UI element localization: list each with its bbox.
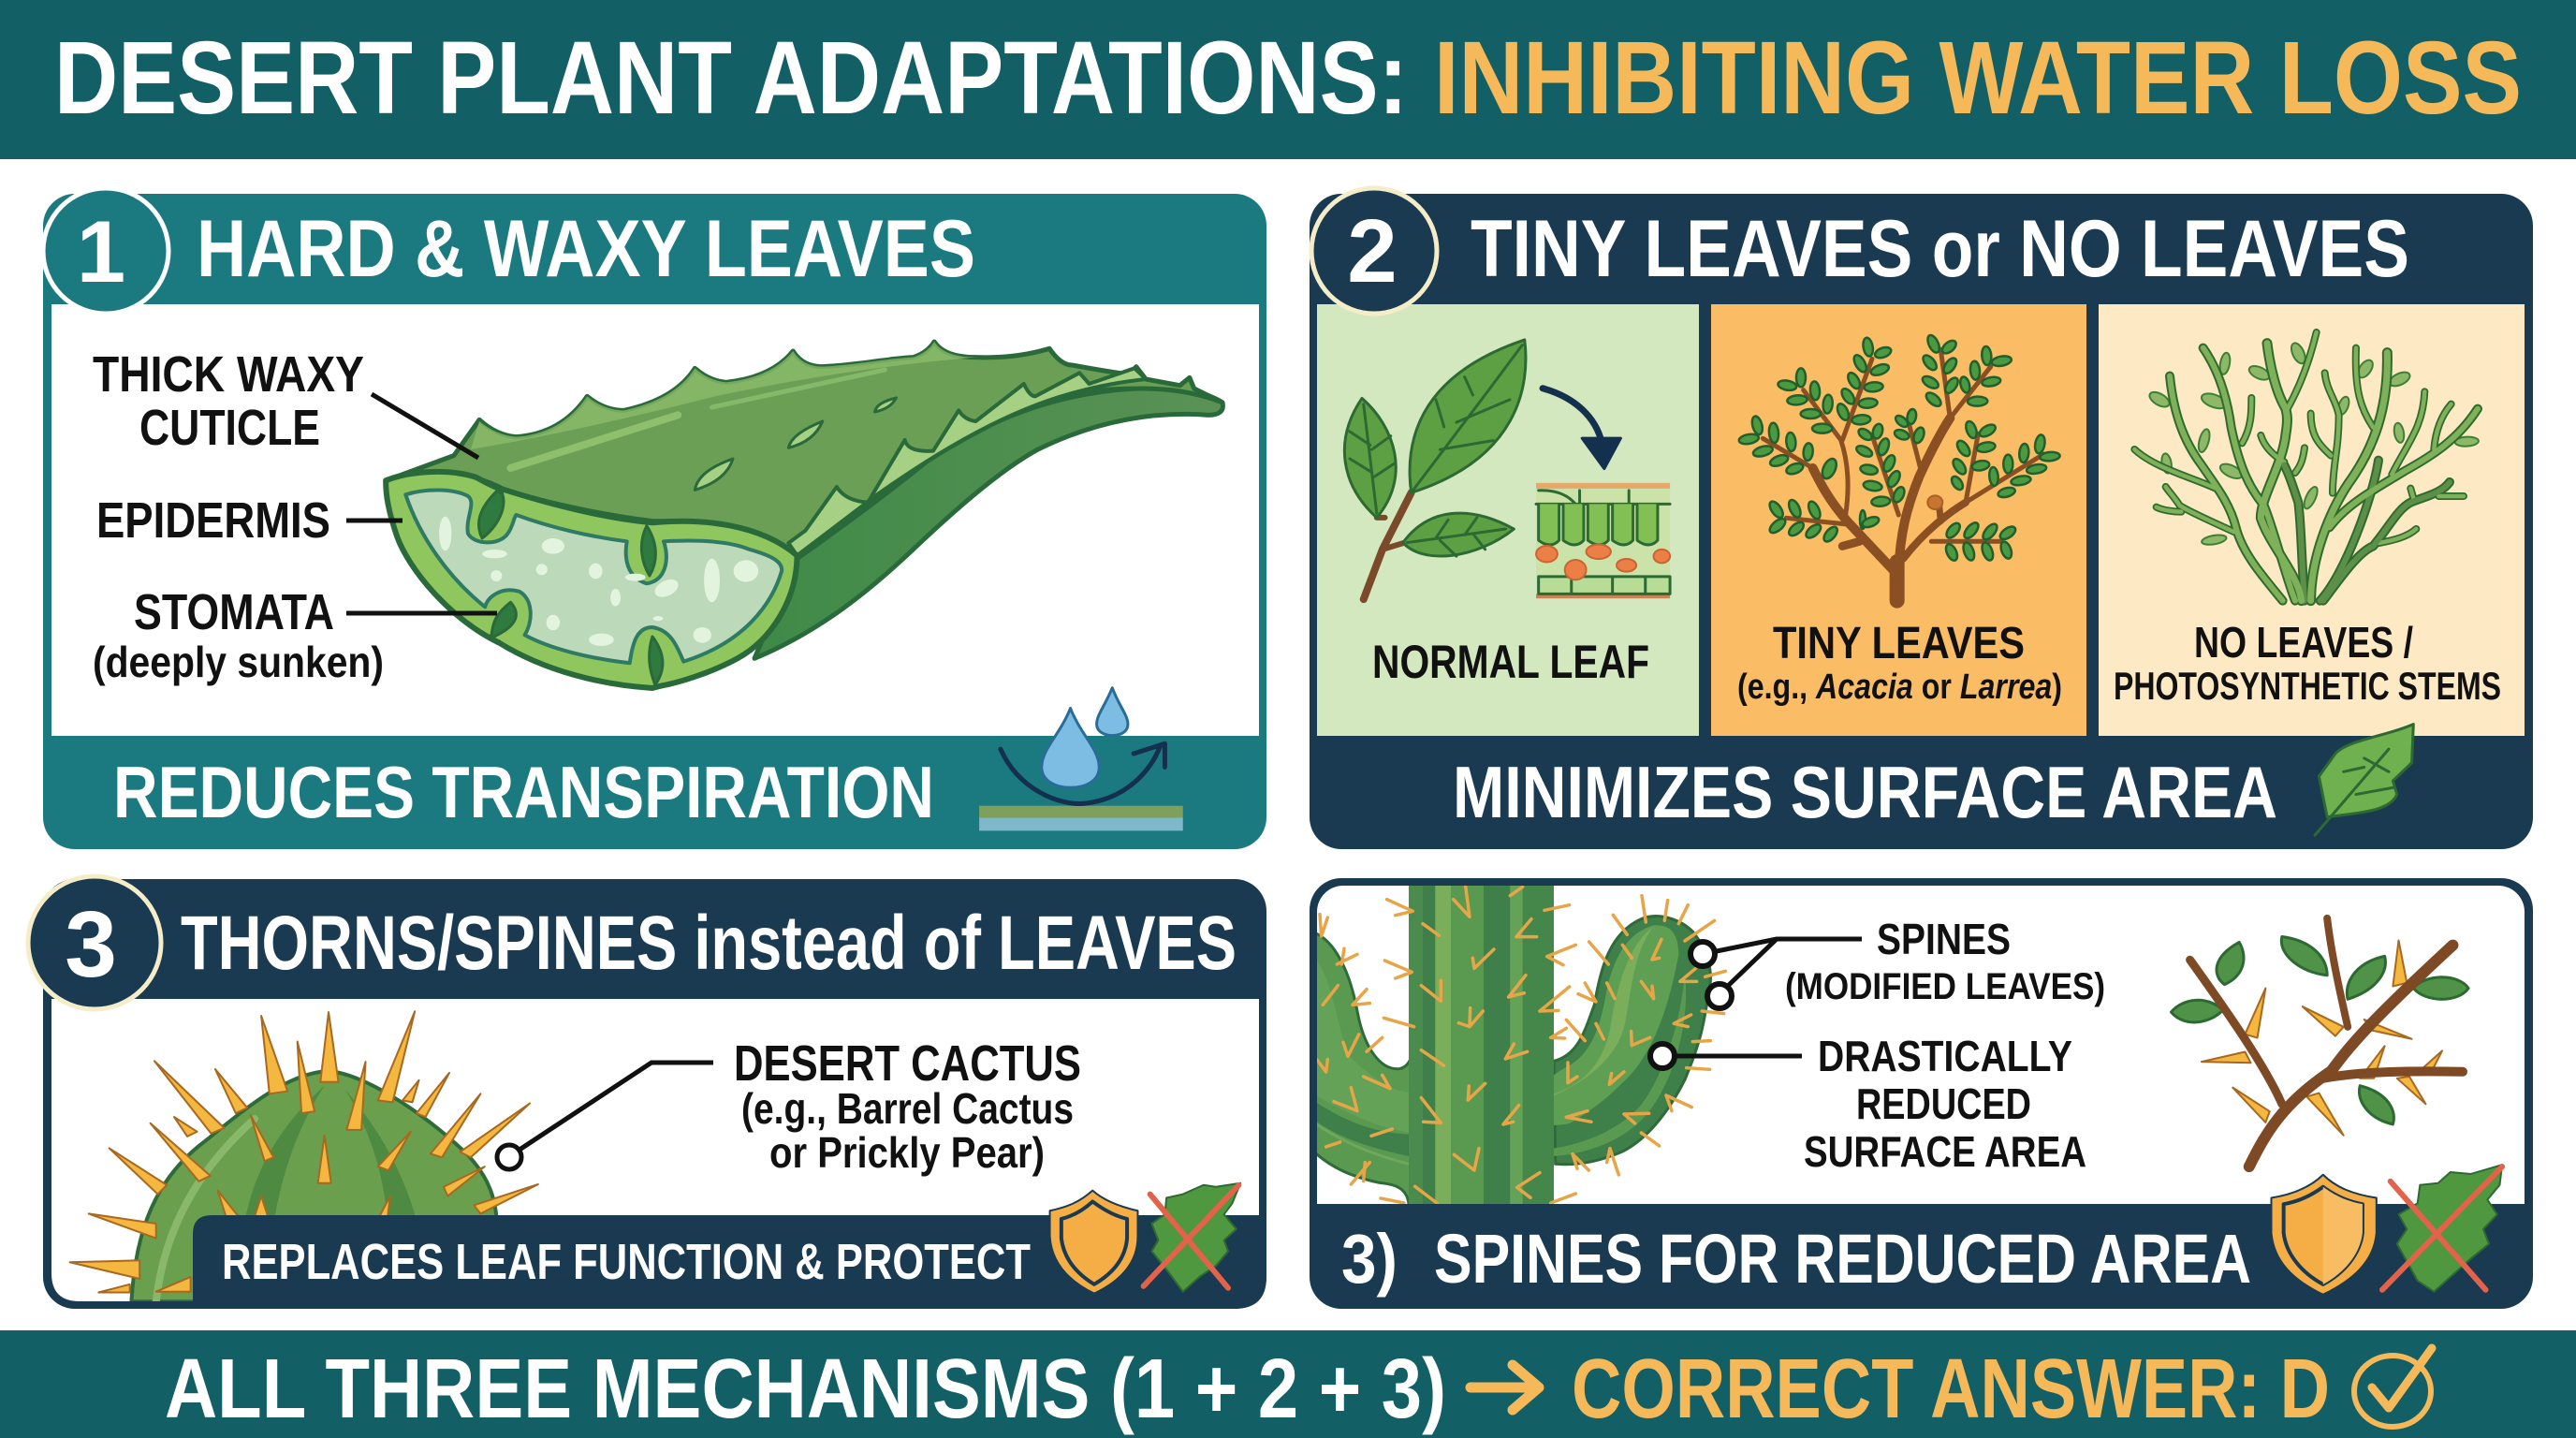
label: stomata xyxy=(93,584,497,686)
panel 3 footer text: REPLACES LEAF FUNCTION & PROTECT xyxy=(222,1234,1031,1290)
label: thick waxy cuticle: THICK WAXY xyxy=(93,346,364,403)
illustration: normal leaves with cross-section xyxy=(1344,340,1670,599)
label: no leaves / photosynthetic stems: NO LEAVES / xyxy=(2194,618,2413,667)
title: main heading: DESERT PLANT ADAPTATIONS: xyxy=(54,21,1408,136)
callout: drastically reduced surface area: DRASTICALLY xyxy=(1818,1032,2072,1080)
illustration: thorny branch xyxy=(2171,918,2468,1167)
icon: shield and crossed-out leaf xyxy=(2271,1165,2502,1295)
label: thick waxy cuticle: CUTICLE xyxy=(139,400,320,456)
answer banner xyxy=(0,1330,2576,1438)
icon: small leaf xyxy=(2315,724,2413,835)
illustration: saguaro cactus xyxy=(1310,880,1725,1205)
label: tiny leaves xyxy=(1737,619,2062,707)
icon: check mark in circle xyxy=(2354,1348,2432,1427)
number badge 1: 1 xyxy=(77,202,125,301)
number badge 2: 2 xyxy=(1347,201,1398,301)
label: tiny leaves: (e.g., Acacia or Larrea) xyxy=(1737,668,2062,707)
callout: spines (modified leaves): SPINES xyxy=(1877,915,2011,963)
callout: desert cactus: (e.g., Barrel Cactus xyxy=(741,1084,1074,1133)
panel 2 heading: TINY LEAVES or NO LEAVES xyxy=(1471,204,2409,294)
label: stomata: (deeply sunken) xyxy=(93,638,384,686)
label: thick waxy cuticle xyxy=(93,346,478,458)
number badge 1 xyxy=(43,188,168,314)
callout: drastically reduced surface area: REDUCED xyxy=(1856,1079,2031,1128)
panel 3: thorns and spines instead of leaves xyxy=(28,876,1266,1309)
sub-panel: normal leaf xyxy=(1317,304,1699,736)
icon: water drops on waxy surface xyxy=(979,688,1183,830)
banner: all three mechanisms: ALL THREE MECHANISMS (1 + 2 + 3) xyxy=(165,1343,1446,1436)
panel 4: spines for reduced area xyxy=(1310,878,2533,1309)
icon: shield and crossed-out leaf xyxy=(1050,1183,1240,1294)
callout: desert cactus: DESERT CACTUS xyxy=(734,1035,1081,1092)
callout: desert cactus xyxy=(497,1035,1081,1177)
label: tiny leaves: TINY LEAVES xyxy=(1773,619,2025,668)
label: normal leaf: NORMAL LEAF xyxy=(1372,636,1649,688)
label: no leaves / photosynthetic stems xyxy=(2114,618,2501,708)
callout: drastically reduced surface area: SURFACE AREA xyxy=(1804,1127,2086,1176)
callout: spines (modified leaves) xyxy=(1690,915,2105,1008)
label: epidermis: EPIDERMIS xyxy=(96,492,330,549)
number badge 3 xyxy=(28,876,161,1009)
panel 2 footer text: MINIMIZES SURFACE AREA xyxy=(1453,751,2277,833)
arrow xyxy=(1471,1365,1539,1410)
callout: spines (modified leaves): (MODIFIED LEAVES) xyxy=(1785,966,2105,1007)
number badge 2 xyxy=(1311,188,1437,314)
panel 2: tiny leaves or no leaves xyxy=(1310,188,2533,849)
title banner xyxy=(0,0,2576,159)
panel 4 footer text: SPINES FOR REDUCED AREA xyxy=(1434,1220,2251,1298)
label: stomata: STOMATA xyxy=(134,584,334,640)
panel 1 heading: HARD & WAXY LEAVES xyxy=(197,204,975,294)
illustration: barrel cactus with spines xyxy=(70,1011,538,1301)
panel 1 footer text: REDUCES TRANSPIRATION xyxy=(113,751,934,833)
callout: desert cactus: or Prickly Pear) xyxy=(769,1128,1045,1177)
illustration: photosynthetic stems xyxy=(2134,332,2479,601)
panel 1: hard and waxy leaves xyxy=(43,188,1266,849)
panel 4 footer text: 3) xyxy=(1341,1220,1398,1298)
panel 3 footer band xyxy=(193,1215,1266,1309)
banner: correct answer: CORRECT ANSWER: D xyxy=(1572,1343,2330,1436)
panel 3 heading: THORNS/SPINES instead of LEAVES xyxy=(181,901,1237,986)
callout: drastically reduced surface area xyxy=(1650,1032,2086,1176)
illustration: aloe leaf cross-section xyxy=(386,342,1222,688)
sub-panel: tiny leaves xyxy=(1711,304,2086,736)
sub-panel: no leaves xyxy=(2099,304,2525,736)
illustration: tiny leaved shrub xyxy=(1738,333,2060,601)
number badge 3: 3 xyxy=(65,892,117,997)
